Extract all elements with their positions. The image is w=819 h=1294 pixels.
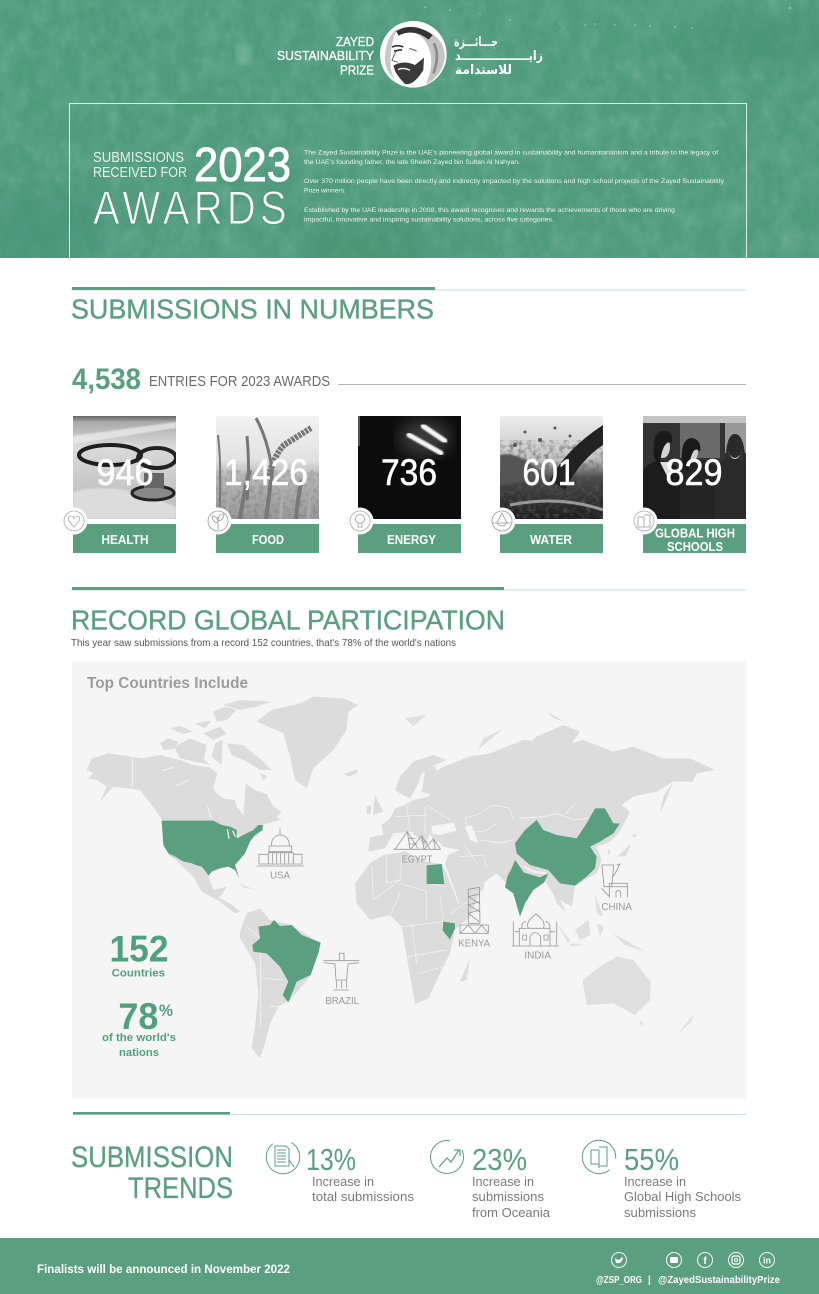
map: europe africa and west asia xyxy=(355,740,530,1004)
icon: school book xyxy=(575,1133,623,1181)
map heading: Top Countries Include xyxy=(87,675,248,692)
card: food: FOOD xyxy=(252,532,284,547)
icon: water drop xyxy=(488,508,516,534)
stat: 78 percent: 78 xyxy=(118,995,158,1037)
icon: heart xyxy=(60,508,88,534)
section subtitle: This year saw submissions from a record 152 countries, that's 78% of the world's nations xyxy=(71,637,456,649)
section: record global participation xyxy=(71,587,747,1099)
label xyxy=(358,524,461,553)
number: 736 xyxy=(381,452,437,493)
map: canada and alaska xyxy=(87,753,287,837)
description xyxy=(624,1174,741,1220)
trend: total submissions xyxy=(260,1134,415,1204)
icon: facebook xyxy=(698,1252,712,1268)
trend: oceania xyxy=(425,1135,551,1220)
map: south america land xyxy=(240,908,320,1058)
stat: 78 percent: nations xyxy=(119,1047,159,1059)
map: canadian lakes and border xyxy=(132,757,212,818)
logo english name: ZAYED xyxy=(336,35,374,49)
photo: splash xyxy=(500,416,603,519)
map: arctic islands and greenland xyxy=(160,697,358,788)
social handles: | xyxy=(648,1275,651,1286)
map: finland xyxy=(422,766,440,795)
footer note: Finalists will be announced in November 2022 xyxy=(37,1262,290,1276)
map: south east asia and oceania xyxy=(405,712,693,1033)
icon: linkedin: in xyxy=(763,1256,771,1266)
total entries xyxy=(72,363,746,396)
hero description: Over 370 million people have been directly and indirectly impacted by the solutions and high school projects of the Zayed Sustainability xyxy=(304,178,725,185)
description: Global High Schools xyxy=(624,1189,741,1204)
hero description: Established by the UAE leadership in 2008, this award recognises and rewards the achievements of those who are driving xyxy=(304,207,675,214)
heading: submission trends xyxy=(71,1141,233,1205)
description: submissions xyxy=(472,1189,544,1204)
hero frame xyxy=(70,104,746,258)
logo english name: SUSTAINABILITY xyxy=(277,49,375,63)
map: western eurasia land xyxy=(368,740,530,905)
description: from Oceania xyxy=(472,1205,551,1220)
stat: 152 countries: 152 xyxy=(109,928,168,970)
number: 1,426 xyxy=(224,452,308,493)
description: total submissions xyxy=(312,1189,415,1204)
icon: bulb xyxy=(346,508,374,534)
map: uk and ireland xyxy=(367,795,383,815)
logo lockup xyxy=(277,21,543,88)
stat: 152 countries: Countries xyxy=(112,968,165,980)
total entries: ENTRIES FOR 2023 AWARDS xyxy=(149,374,330,390)
social handles xyxy=(596,1275,780,1286)
map: africa land xyxy=(355,852,485,1004)
hero description: impactful, innovative and inspiring sustainability solutions, across five categories. xyxy=(304,216,554,224)
social icons xyxy=(612,1252,774,1268)
map: brazil xyxy=(252,920,321,1002)
map: caribbean xyxy=(238,883,258,891)
logo portrait xyxy=(380,21,447,88)
icon: china great wall xyxy=(602,864,627,897)
icon: youtube xyxy=(666,1252,682,1268)
hero title xyxy=(93,139,291,235)
description xyxy=(312,1174,415,1204)
card: energy: ENERGY xyxy=(387,532,436,547)
icon: instagram xyxy=(728,1252,744,1268)
photo: students xyxy=(643,416,746,519)
label: usa: USA xyxy=(270,871,290,882)
icon: kenya tower xyxy=(460,887,488,933)
map: great lakes xyxy=(227,829,235,839)
map: south america borders xyxy=(247,927,283,1027)
description: submissions xyxy=(624,1205,696,1220)
description xyxy=(472,1174,551,1220)
footer xyxy=(0,1238,819,1294)
map: mexico and central america xyxy=(170,853,240,913)
map: madagascar xyxy=(460,958,470,982)
section: submissions in numbers xyxy=(60,287,746,554)
logo arabic name xyxy=(454,34,543,77)
value: 23% xyxy=(472,1142,527,1177)
map: central and south america xyxy=(102,853,359,1059)
total entries: 4,538 xyxy=(72,363,141,396)
icon: plant xyxy=(204,508,232,534)
icon: usa capitol xyxy=(257,828,304,866)
hero title: 2023 xyxy=(194,139,291,192)
stat: 78 percent: % xyxy=(159,1001,173,1020)
number: 829 xyxy=(666,452,722,493)
map: borders xyxy=(372,805,513,973)
hero description xyxy=(304,150,725,224)
hero description: The Zayed Sustainability Prize is the UAE's pioneering global award in sustainability and humanitarianism and a tribute to the legacy of xyxy=(304,150,718,156)
map: sakhalin and japan xyxy=(607,783,673,857)
stat: 78 percent xyxy=(102,995,176,1059)
icon: egypt pyramids xyxy=(393,832,441,849)
icon: document xyxy=(260,1134,306,1180)
photo: lights xyxy=(358,416,461,519)
icon: facebook: f xyxy=(703,1256,707,1267)
card: energy xyxy=(346,416,461,553)
photo: wheat xyxy=(216,416,319,519)
icon: growth chart xyxy=(425,1135,469,1179)
number: 946 xyxy=(96,452,154,493)
number: 601 xyxy=(522,452,576,493)
icon: school book xyxy=(630,508,658,534)
hero description: the UAE's founding father, the late Sheikh Zayed bin Sultan Al Nahyan. xyxy=(304,159,520,166)
label xyxy=(500,524,603,553)
label xyxy=(73,524,176,553)
logo arabic name: جـــائـــزة xyxy=(454,34,498,49)
map: islands xyxy=(405,712,693,1033)
label: kenya: KENYA xyxy=(458,939,490,950)
value: 13% xyxy=(306,1142,356,1177)
map: eastern eurasia land xyxy=(520,725,715,887)
label: india: INDIA xyxy=(524,951,551,962)
heading: submission trends: TRENDS xyxy=(128,1172,233,1205)
map: indochina xyxy=(543,877,575,913)
icon: twitter xyxy=(612,1252,626,1268)
map: north america xyxy=(87,697,358,882)
icon: linkedin xyxy=(760,1252,774,1268)
map: east asia xyxy=(520,725,715,887)
map: inland seas xyxy=(432,823,478,843)
hero banner xyxy=(0,0,819,280)
social handles: @ZayedSustainabilityPrize xyxy=(658,1275,780,1286)
logo arabic name: زايــــــــــــــــــد xyxy=(455,48,543,63)
card: health xyxy=(60,416,176,553)
label: brazil: BRAZIL xyxy=(325,996,359,1007)
logo arabic name: للاستدامة xyxy=(455,62,512,77)
map: kenya xyxy=(443,922,455,939)
description: Increase in xyxy=(624,1174,686,1189)
panel: world map xyxy=(72,661,747,1099)
hero title: SUBMISSIONS xyxy=(93,150,184,166)
photo: stethoscope xyxy=(73,416,176,519)
card: health: HEALTH xyxy=(102,532,148,547)
icon: christ the redeemer xyxy=(323,953,359,990)
map: mongolia border and baikal xyxy=(520,803,588,820)
card: water xyxy=(488,416,603,553)
card: global high schools xyxy=(630,416,746,554)
value: 55% xyxy=(624,1142,679,1177)
logo english name xyxy=(277,35,375,78)
social handles: @ZSP_ORG xyxy=(596,1275,642,1286)
hero crowd background xyxy=(0,0,819,280)
logo english name: PRIZE xyxy=(340,64,374,78)
map: scandinavia xyxy=(395,755,447,798)
label xyxy=(643,524,746,554)
hero description: Prize winners. xyxy=(304,188,346,194)
hero title: AWARDS xyxy=(93,183,291,235)
map: egypt xyxy=(427,864,444,884)
label: GLOBAL HIGH xyxy=(655,526,735,540)
description: Increase in xyxy=(472,1174,534,1189)
map: china xyxy=(515,808,620,886)
section: submission trends xyxy=(71,1112,746,1220)
card: water: WATER xyxy=(530,532,573,547)
label: SCHOOLS xyxy=(667,540,723,554)
description: Increase in xyxy=(312,1174,374,1189)
heading: record global participation: RECORD GLOBAL PARTICIPATION xyxy=(71,604,505,636)
map: nepal gap xyxy=(524,867,547,873)
map: india xyxy=(505,860,548,917)
map: usa xyxy=(162,821,263,878)
stat: 78 percent: of the world's xyxy=(102,1032,176,1044)
label xyxy=(216,524,319,553)
hero title: RECEIVED FOR xyxy=(93,165,187,181)
trend: global high schools xyxy=(575,1133,741,1220)
icon: india taj mahal xyxy=(512,914,559,946)
label: china: CHINA xyxy=(601,902,632,913)
card: food xyxy=(204,416,319,553)
heading: submission trends: SUBMISSION xyxy=(71,1141,233,1174)
label: egypt: EGYPT xyxy=(402,854,432,865)
heading: submissions in numbers: SUBMISSIONS IN NUMBERS xyxy=(71,294,434,324)
